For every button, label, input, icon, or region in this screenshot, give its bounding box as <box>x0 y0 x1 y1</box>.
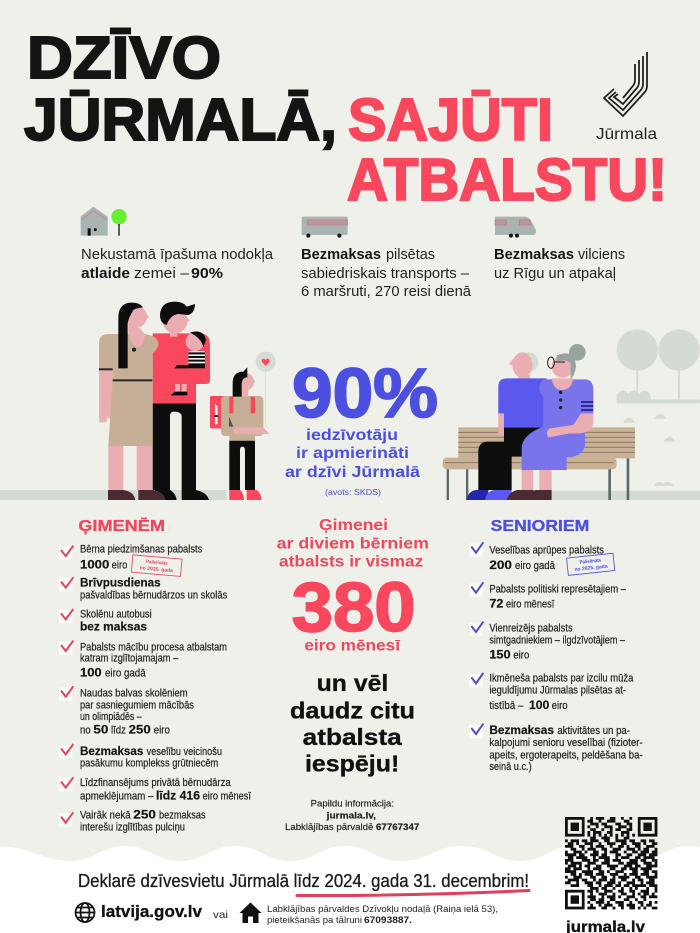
bench <box>443 427 635 500</box>
link: latvija.gov.lv: latvija.gov.lv <box>101 902 203 921</box>
heading: Senioriem: SENIORIEM <box>491 518 589 535</box>
statistic: 90% satisfied: (avots: SKDS) <box>325 488 381 497</box>
statistic: 90% satisfied: ir apmierināti <box>296 445 409 462</box>
text: and many other options: daudz citu <box>290 697 415 723</box>
item: kindergarten co-financing: eiro mēnesī <box>203 790 251 802</box>
text: further information: Papildu informācija: <box>311 799 394 809</box>
item: learning support: katram izglītojamajam – <box>80 653 178 665</box>
item: cash awards <box>59 686 194 736</box>
item: free activities: seinā u.c.) <box>489 761 532 773</box>
text: family with two children <box>277 517 429 571</box>
item: school buses: Skolēnu autobusi <box>80 608 152 620</box>
benefit: public transport <box>301 217 472 300</box>
item: interest clubs: bezmaksas <box>159 809 206 821</box>
item: kindergarten co-financing: līdz 416 <box>156 788 200 802</box>
icon: train <box>495 217 536 238</box>
item: health care allowance: eiro gadā <box>515 560 555 572</box>
item: free lunches: Brīvpusdienas <box>80 576 161 590</box>
item: health care allowance: Veselības aprūpes pabalsts <box>489 544 604 556</box>
icon: house <box>240 902 262 923</box>
text: family with two children: atbalsts ir vismaz <box>279 554 423 571</box>
logo: Jūrmala: Jūrmala <box>596 126 657 143</box>
benefit: public transport: pilsētas <box>386 247 435 263</box>
trees <box>552 329 700 500</box>
benefit: property tax: atlaide <box>81 266 130 282</box>
benefit: train <box>494 217 625 282</box>
item: cash awards: no <box>80 724 91 736</box>
benefit: train: Bezmaksas <box>494 247 574 263</box>
item: interest clubs: 250 <box>133 807 156 821</box>
text: welfare department contact: 67093887. <box>364 915 412 926</box>
item: lifetime contribution: Ikmēneša pabalsts par izcilu mūža <box>489 673 633 685</box>
text: and many other options: iespēju! <box>305 751 399 777</box>
title: Dzīvo Jūrmalā, sajūti atbalstu <box>24 25 667 213</box>
benefit: property tax <box>81 207 274 282</box>
text: further information <box>285 799 419 832</box>
callout: declare residence: Deklarē dzīvesvietu Jūrmalā līdz 2024. gada 31. decembrim! <box>78 871 529 891</box>
item: politically repressed: eiro mēnesī <box>506 599 554 611</box>
title: Dzīvo Jūrmalā, sajūti atbalstu: SAJŪTI <box>348 87 553 153</box>
item: pregnancy health: Bezmaksas <box>80 744 143 758</box>
number: 380: 380 <box>292 568 416 646</box>
item: free activities <box>469 723 643 773</box>
statistic: 90% satisfied: iedzīvotāju <box>306 427 398 444</box>
item: cash awards: 50 <box>93 722 108 736</box>
stamp: increased from 2025: no 2025. gada <box>574 564 608 573</box>
item: school buses: bez maksas <box>80 620 147 634</box>
benefit: property tax: zemei – <box>134 266 190 282</box>
text: family with two children: Ģimenei <box>319 517 388 534</box>
man with baby <box>153 302 210 500</box>
item: kindergarten co-financing <box>59 777 251 802</box>
item: learning support: 100 <box>80 666 102 680</box>
text: welfare department contact: pieteikšanās pa tālruni <box>267 915 362 926</box>
senior woman <box>507 344 593 500</box>
woman <box>99 303 165 500</box>
text: and many other options: un vēl <box>317 670 388 696</box>
item: politically repressed <box>469 582 626 611</box>
illustration: family <box>0 302 276 500</box>
item: centenarians <box>469 622 625 661</box>
item: birth allowance: eiro <box>112 559 127 571</box>
item: free lunches: pašvaldības bērnudārzos un skolās <box>80 590 227 602</box>
logo: Jūrmala <box>596 52 657 143</box>
item: lifetime contribution: tistībā – <box>489 700 523 712</box>
panel: seniors <box>469 518 643 773</box>
item: centenarians: 150 <box>489 647 511 661</box>
item: school buses <box>59 608 152 634</box>
icon: bus <box>302 217 348 238</box>
item: cash awards: 250 <box>129 722 151 736</box>
item: centenarians: Vienreizējs pabalsts <box>489 623 573 635</box>
item: free activities: Bezmaksas <box>489 723 554 737</box>
illustration: seniors on bench <box>443 329 700 500</box>
item: free activities: apeits, ergoterapeits, peldēšana ba- <box>489 749 643 761</box>
item: free activities: aktivitātes un pa- <box>557 725 630 737</box>
benefit: train: vilciens <box>578 247 625 263</box>
item: learning support <box>59 641 227 680</box>
item: free lunches <box>59 576 227 602</box>
item: birth allowance: Bērna piedzimšanas pabalsts <box>80 543 202 555</box>
statistic: 90% satisfied: ar dzīvi Jūrmalā <box>285 464 420 481</box>
item: kindergarten co-financing: Līdzfinansējums privātā bērnudārza <box>80 777 231 789</box>
item: centenarians: eiro <box>513 649 529 661</box>
item: learning support: eiro gadā <box>105 668 146 680</box>
child with balloon <box>210 352 276 500</box>
benefit: property tax: 90% <box>191 266 223 282</box>
text: further information: Labklājības pārvaldē <box>285 822 373 832</box>
item: cash awards: līdz <box>111 724 126 736</box>
text: and many other options <box>290 670 415 777</box>
item: lifetime contribution: ieguldījumu Jūrmalas pilsētas at- <box>489 684 626 696</box>
item: pregnancy health: pasākumu komplekss grūtniecēm <box>80 758 218 770</box>
icon: house and tree <box>81 207 127 236</box>
item: interest clubs: Vairāk nekā <box>80 809 131 821</box>
text: euro per month: eiro mēnesī <box>304 638 401 655</box>
benefit: public transport: sabiedriskais transports – <box>301 266 470 282</box>
item: lifetime contribution <box>469 673 633 712</box>
item: free activities: kalpojumi senioru veselībai (fizioter- <box>489 737 643 749</box>
item: pregnancy health: veselību veicinošu <box>147 746 222 758</box>
item: birth allowance <box>59 543 202 571</box>
item: politically repressed: Pabalsts politiski represētajiem – <box>489 583 626 595</box>
item: cash awards: par sasniegumiem mācībās <box>80 699 194 711</box>
item: lifetime contribution: 100 <box>529 698 549 712</box>
QR code <box>565 818 657 908</box>
benefit: public transport: Bezmaksas <box>301 247 381 263</box>
stamp: increased from 2025 <box>567 553 615 575</box>
item: cash awards: Naudas balvas skolēniem <box>80 687 188 699</box>
benefit: train: uz Rīgu un atpakaļ <box>494 266 616 282</box>
item: birth allowance: 1000 <box>80 557 109 571</box>
item: lifetime contribution: eiro <box>552 700 568 712</box>
statistic: 90% satisfied <box>285 354 438 497</box>
text: or: vai <box>213 909 228 921</box>
panel: centre support summary <box>277 517 429 832</box>
item: interest clubs <box>59 807 206 834</box>
item: kindergarten co-financing: apmeklējumam – <box>80 790 153 802</box>
text: and many other options: atbalsta <box>303 724 403 750</box>
text: welfare department contact <box>267 904 498 926</box>
title: Dzīvo Jūrmalā, sajūti atbalstu: JŪRMALĀ, <box>24 87 337 153</box>
title: Dzīvo Jūrmalā, sajūti atbalstu: DZĪVO <box>27 25 221 91</box>
item: interest clubs: interešu izglītības pulciņu <box>80 822 185 834</box>
item: politically repressed: 72 <box>489 597 503 611</box>
item: pregnancy health <box>59 744 222 770</box>
text: further information: 67767347 <box>376 822 419 832</box>
stamp: increased from 2025: Palielināts <box>146 559 168 567</box>
item: cash awards: eiro <box>154 724 170 736</box>
heading: Ģimenēm: ĢIMENĒM <box>78 516 165 535</box>
icon: globe <box>76 903 94 922</box>
item: health care allowance: 200 <box>489 558 512 572</box>
text: further information: jurmala.lv, <box>326 810 376 820</box>
text: family with two children: ar diviem bērniem <box>277 535 429 552</box>
footer: white wave band <box>0 846 700 933</box>
text: welfare department contact: Labklājības pārvaldes Dzīvokļu nodaļā (Raiņa ielā 53), <box>267 904 498 915</box>
stamp: increased from 2025 <box>131 555 182 576</box>
item: cash awards: un olimpiādēs – <box>80 711 142 723</box>
item: learning support: Pabalsts mācību procesa atbalstam <box>80 641 227 653</box>
item: health care allowance <box>469 542 604 572</box>
stamp: increased from 2025: Palielināts <box>579 558 602 566</box>
stamp: increased from 2025: no 2025. gada <box>139 565 173 574</box>
benefit: public transport: 6 maršruti, 270 reisi dienā <box>301 284 472 300</box>
benefit: property tax: Nekustamā īpašuma nodokļa <box>81 247 274 263</box>
title: Dzīvo Jūrmalā, sajūti atbalstu: ATBALSTU! <box>347 147 667 213</box>
statistic: 90% satisfied: 90% <box>292 354 438 432</box>
item: centenarians: simtgadniekiem – ilgdzīvotājiem – <box>489 634 625 646</box>
panel: families <box>59 516 251 834</box>
senior man <box>467 352 547 500</box>
